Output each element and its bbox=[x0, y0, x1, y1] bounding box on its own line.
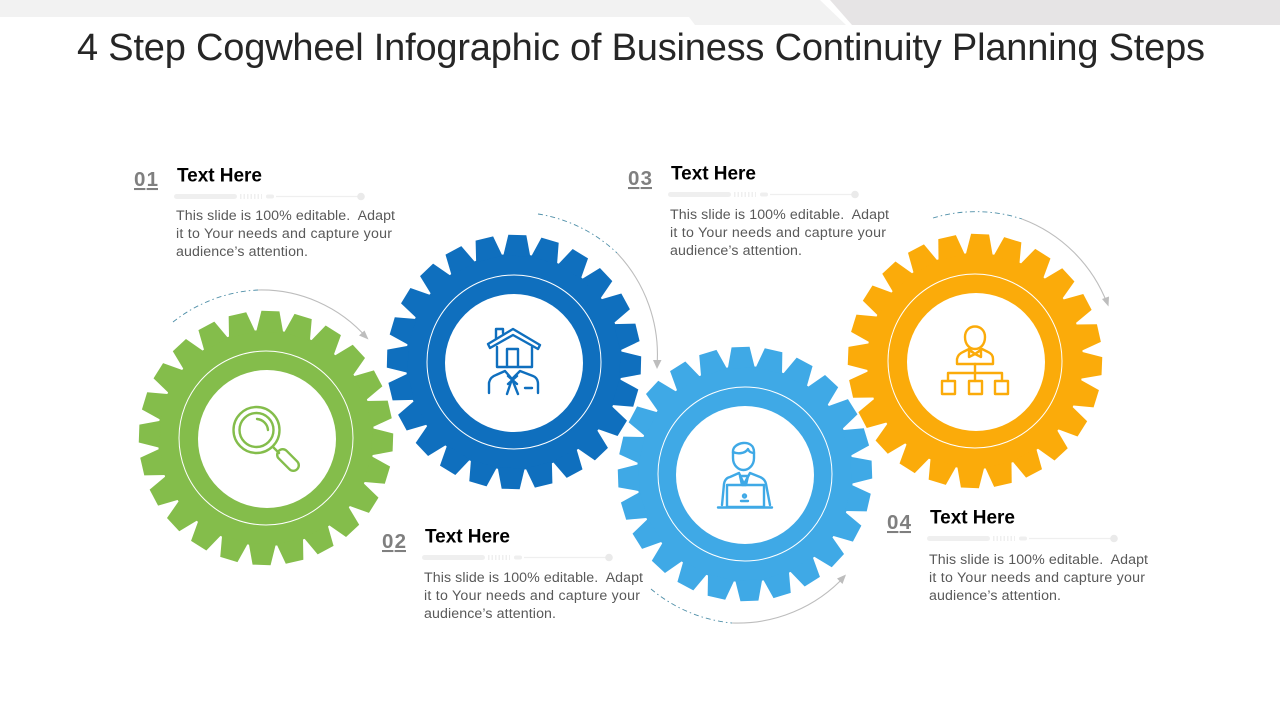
gear 2: blue with house and person bbox=[384, 232, 644, 492]
step 02 heading: Text Here bbox=[425, 526, 510, 548]
icon: magnifying glass bbox=[234, 407, 301, 473]
step 04 description: it to Your needs and capture your bbox=[929, 570, 1145, 586]
step 02 description: it to Your needs and capture your bbox=[424, 588, 640, 604]
step 04 heading: Text Here bbox=[930, 508, 1015, 528]
step 03 description: audience’s attention. bbox=[670, 243, 802, 259]
step 01 description: This slide is 100% editable. Adapt bbox=[176, 208, 395, 224]
step 04 description bbox=[929, 552, 1148, 604]
gear 4: yellow with org chart bbox=[843, 229, 1107, 493]
step 03 heading: Text Here bbox=[671, 164, 756, 184]
arrow: around blue gear bbox=[538, 214, 662, 369]
step 03 number: 03 bbox=[628, 167, 652, 190]
step 03 description bbox=[670, 207, 889, 259]
gear 1: green with magnifier bbox=[135, 307, 397, 569]
step 02 text block bbox=[382, 526, 643, 622]
step 04 text block bbox=[887, 508, 1148, 604]
gear 3: light blue with laptop user bbox=[614, 343, 876, 605]
step 03 description: it to Your needs and capture your bbox=[670, 225, 886, 241]
step 01 description: it to Your needs and capture your bbox=[176, 226, 392, 242]
step 03 description: This slide is 100% editable. Adapt bbox=[670, 207, 889, 223]
step 02 description: This slide is 100% editable. Adapt bbox=[424, 570, 643, 586]
step 02 description: audience’s attention. bbox=[424, 606, 556, 622]
icon: person and org chart bbox=[942, 326, 1008, 394]
step 01 text block bbox=[134, 166, 395, 260]
step 04 description: audience’s attention. bbox=[929, 588, 1061, 604]
top header band bbox=[0, 0, 1280, 25]
title: 4 Step Cogwheel Infographic of Business Continuity Planning Steps bbox=[77, 27, 1205, 69]
step 01 number: 01 bbox=[134, 168, 158, 191]
step 04 number: 04 bbox=[887, 511, 912, 534]
step 01 description: audience’s attention. bbox=[176, 244, 308, 260]
arrow: around light blue gear bbox=[651, 574, 846, 623]
icon: house and person bbox=[488, 329, 540, 394]
icon: person at laptop bbox=[718, 443, 772, 508]
step 04 description: This slide is 100% editable. Adapt bbox=[929, 552, 1148, 568]
step 02 description bbox=[424, 570, 643, 622]
step 01 description bbox=[176, 208, 395, 260]
arrow: around yellow gear bbox=[933, 212, 1109, 306]
arrow: around green gear bbox=[173, 290, 368, 340]
step 03 text block bbox=[628, 164, 889, 259]
step 02 number: 02 bbox=[382, 530, 406, 553]
step 01 heading: Text Here bbox=[177, 166, 262, 186]
